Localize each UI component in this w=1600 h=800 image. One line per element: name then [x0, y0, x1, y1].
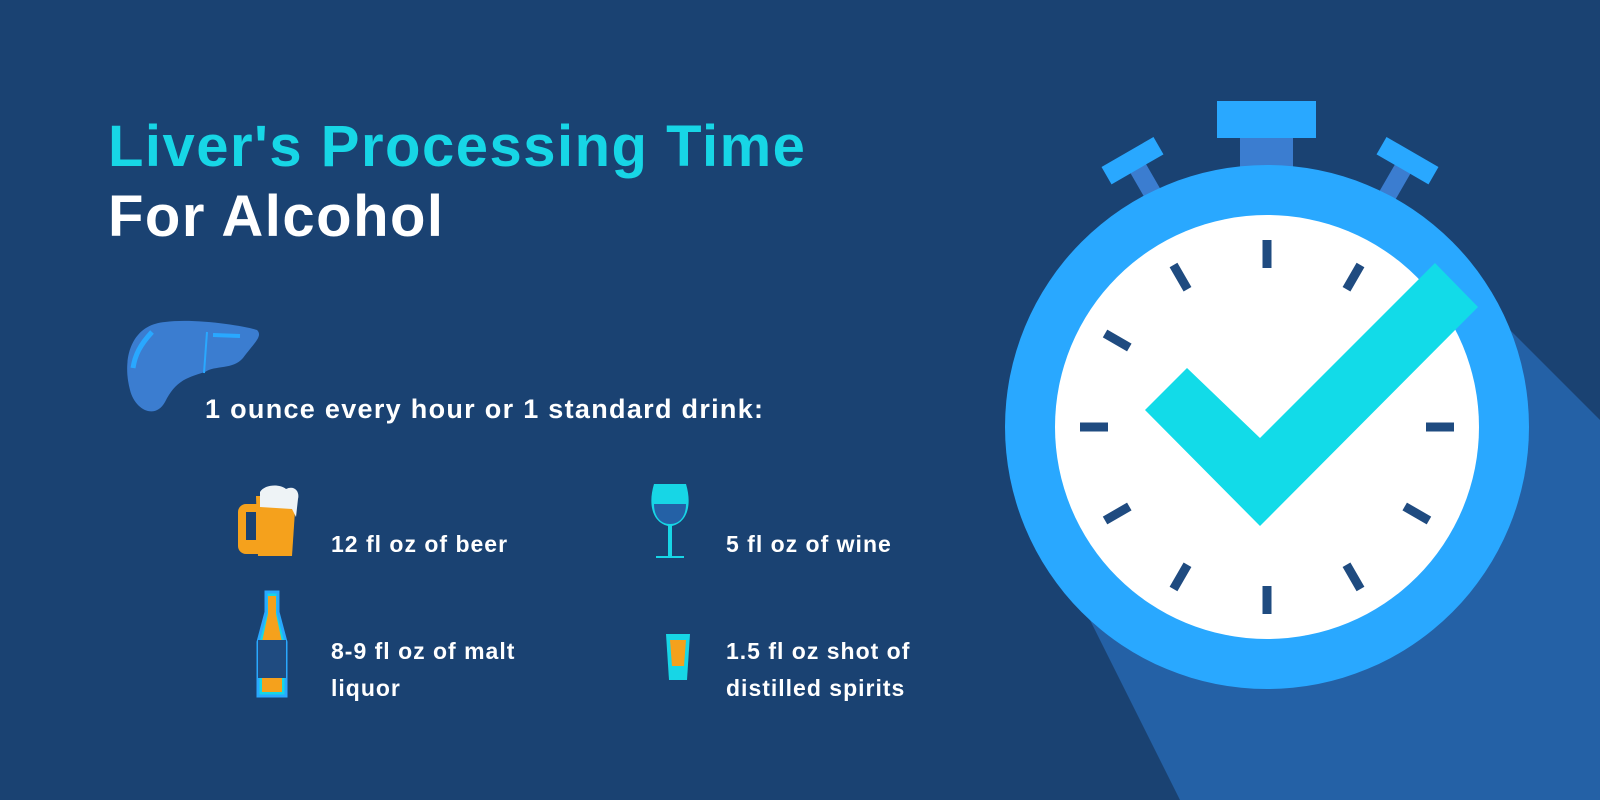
text: malt liquor: 8-9 fl oz of malt — [331, 638, 515, 664]
text: beer: 12 fl oz of beer — [331, 531, 508, 557]
checkmark — [1145, 263, 1478, 526]
icon: beer mug — [238, 486, 298, 556]
icon: liver — [127, 320, 259, 412]
title: Liver's Processing Time — [108, 114, 806, 179]
text: spirits — [726, 638, 910, 701]
text: spirits: 1.5 fl oz shot of — [726, 638, 910, 664]
title: For Alcohol — [108, 184, 445, 249]
icon: wine glass — [651, 484, 689, 558]
shadow — [1080, 320, 1600, 800]
text: wine: 5 fl oz of wine — [726, 531, 892, 557]
icon: bottle — [256, 590, 288, 698]
side buttons — [1102, 137, 1181, 215]
icon: shot glass — [666, 634, 690, 680]
text: rate: 1 ounce every hour or 1 standard drink: — [205, 394, 764, 424]
text: malt liquor: liquor — [331, 675, 401, 701]
text: spirits: distilled spirits — [726, 675, 905, 701]
text: malt liquor — [331, 638, 515, 701]
title — [108, 114, 806, 249]
